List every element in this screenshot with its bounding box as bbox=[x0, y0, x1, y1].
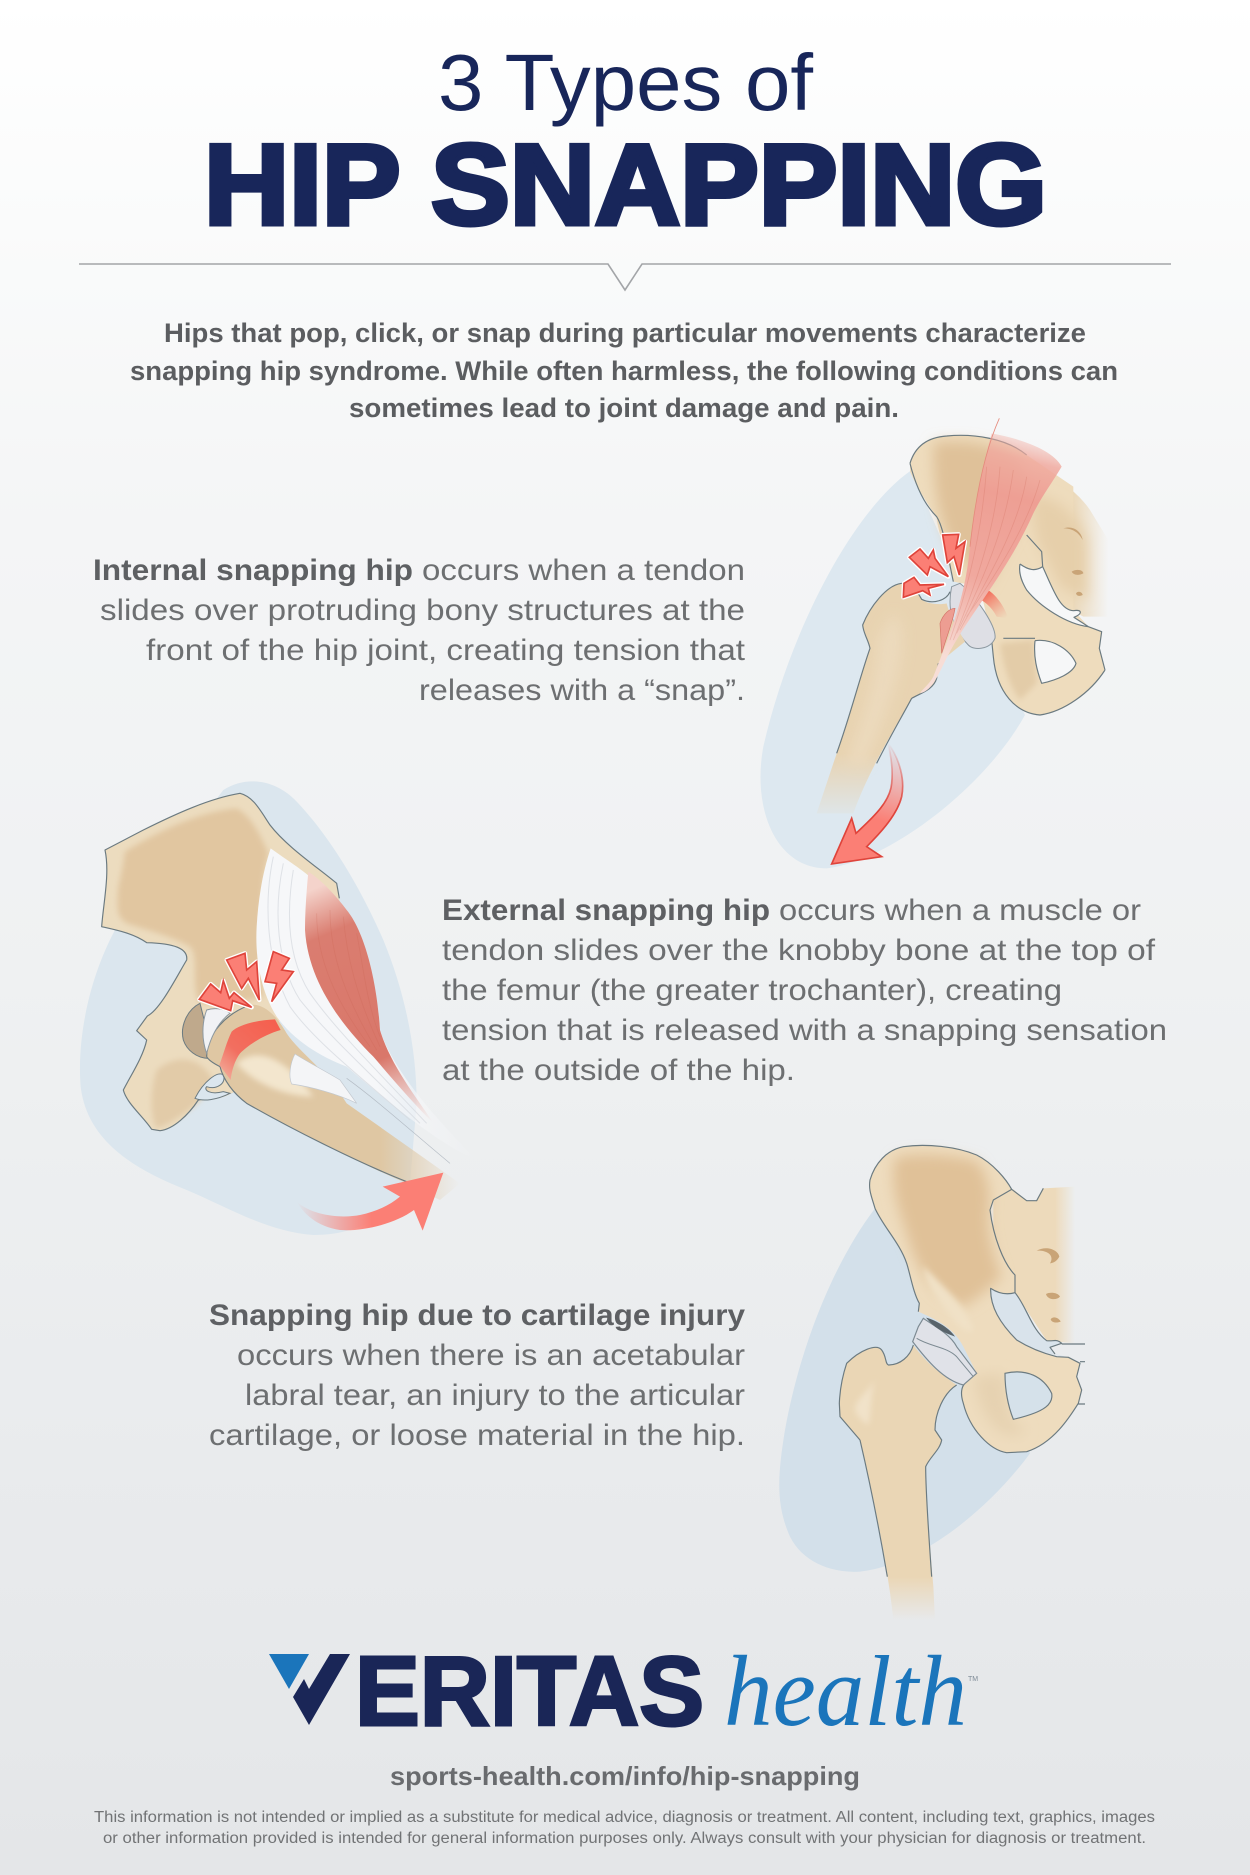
pelvis bone bbox=[910, 435, 1105, 715]
ilium highlight bbox=[923, 1267, 973, 1332]
lower tendon line bbox=[347, 1078, 450, 1163]
femur shading bbox=[847, 613, 903, 767]
gluteal muscle bbox=[305, 872, 435, 1125]
lower pelvis shading bbox=[973, 1373, 1027, 1435]
logo: Veritas health bbox=[269, 1635, 978, 1747]
motion arrow bbox=[832, 743, 903, 864]
pelvis bone bbox=[870, 1145, 1082, 1453]
red inflamed area bbox=[219, 1019, 281, 1080]
pelvis shading bbox=[118, 808, 268, 1003]
text block: external snapping hip: at the outside of the hip. bbox=[442, 1054, 795, 1087]
logo health script: health bbox=[724, 1635, 967, 1747]
text block: cartilage injury: Snapping hip due to cartilage injury bbox=[209, 1299, 745, 1332]
tendon outline bbox=[970, 418, 999, 547]
lower pelvis shading bbox=[152, 1060, 213, 1128]
text block: internal snapping hip: slides over protruding bony structures at the bbox=[100, 594, 745, 627]
pelvis shading bbox=[933, 442, 1030, 587]
joint cartilage bbox=[913, 1318, 977, 1385]
ilium shading bbox=[893, 1155, 1002, 1307]
divider with notch bbox=[79, 264, 1171, 290]
sacrum bbox=[993, 1187, 1075, 1343]
logo wordmark: ERITAS bbox=[355, 1636, 704, 1746]
text block: cartilage injury: cartilage, or loose material in the hip. bbox=[209, 1419, 745, 1452]
blue backdrop bbox=[80, 781, 417, 1235]
text block: internal snapping hip bbox=[93, 554, 746, 707]
blue backdrop bbox=[760, 470, 1025, 868]
title line: HIP SNAPPING: HIP SNAPPING bbox=[204, 122, 1047, 249]
obturator opening bbox=[195, 1074, 230, 1100]
disclaimer: This information is not intended or implied as a substitute for medical advice, diagnosis or treatment. All content, including text, graphics, images bbox=[94, 1809, 1155, 1826]
illustration: internal snapping hip bbox=[760, 418, 1108, 868]
text block: cartilage injury bbox=[209, 1299, 745, 1452]
impact bolts bbox=[903, 534, 965, 597]
femur highlight bbox=[237, 1055, 313, 1097]
title bbox=[204, 38, 1047, 249]
illustration: cartilage injury hip bbox=[779, 1145, 1085, 1620]
cartilage line bbox=[917, 1338, 973, 1377]
sacral foramina bbox=[1063, 527, 1083, 596]
text block: internal snapping hip: Internal snapping hip bbox=[93, 554, 413, 587]
obturator opening bbox=[1005, 1372, 1052, 1419]
text block: internal snapping hip: occurs when a tendon bbox=[422, 554, 745, 587]
impact bolts bbox=[199, 952, 293, 1011]
labral tear bbox=[926, 1318, 955, 1337]
text block: cartilage injury: occurs when there is an acetabular bbox=[237, 1339, 745, 1372]
joint cartilage bbox=[950, 583, 995, 648]
text block: external snapping hip bbox=[442, 894, 1167, 1087]
red inflamed area bbox=[974, 586, 1008, 618]
femur outline bbox=[837, 583, 950, 763]
IT band bbox=[256, 848, 477, 1160]
intro text block: sometimes lead to joint damage and pain. bbox=[349, 393, 899, 423]
text block: external snapping hip: External snapping hip bbox=[442, 894, 770, 927]
muscle fibres bbox=[950, 467, 1040, 640]
femur bbox=[839, 1345, 957, 1620]
muscle fibres bbox=[317, 910, 380, 1050]
sacral foramina bbox=[1037, 1248, 1061, 1323]
iliopsoas muscle bbox=[920, 433, 1062, 693]
sacrum shading bbox=[1030, 496, 1087, 600]
pelvis outline bbox=[102, 793, 339, 1131]
band fibres bbox=[268, 857, 427, 1123]
logo V mark bbox=[293, 1654, 350, 1725]
motion arrow bbox=[297, 1173, 443, 1231]
title line: 3 Types of: 3 Types of bbox=[438, 38, 814, 127]
text block: external snapping hip: occurs when a muscle or bbox=[779, 894, 1141, 927]
text block: external snapping hip: the femur (the greater trochanter), creating bbox=[442, 974, 1062, 1007]
intro text block bbox=[130, 318, 1118, 423]
text block: external snapping hip: tendon slides over the knobby bone at the top of bbox=[442, 934, 1156, 967]
pelvis holes bbox=[1020, 564, 1088, 627]
text block: internal snapping hip: releases with a “snap”. bbox=[419, 674, 745, 707]
femur outline bbox=[839, 1345, 957, 1577]
disclaimer: or other information provided is intended for general information purposes only. Always consult with your physician for diagnosis or treatment. bbox=[103, 1830, 1146, 1847]
trademark: TM bbox=[968, 1676, 978, 1683]
intro text block: Hips that pop, click, or snap during particular movements characterize bbox=[164, 318, 1086, 348]
logo triangle bbox=[269, 1654, 309, 1689]
labrum bbox=[203, 1009, 230, 1053]
tendon stump bbox=[290, 1054, 357, 1103]
pelvis bone bbox=[102, 793, 343, 1131]
femur detail bbox=[855, 1380, 875, 1425]
sacroiliac opening bbox=[991, 1288, 1068, 1357]
ischium shading bbox=[1000, 640, 1037, 700]
acetabulum bbox=[182, 1003, 208, 1058]
femur bbox=[817, 583, 965, 813]
illustration: external snapping hip bbox=[80, 781, 477, 1235]
tendon insertion bbox=[940, 608, 955, 653]
source url: sports-health.com/info/hip-snapping bbox=[390, 1761, 860, 1791]
disclaimer bbox=[94, 1809, 1155, 1847]
pelvis outline bbox=[870, 1145, 1085, 1453]
text block: external snapping hip: tension that is released with a snapping sensation bbox=[442, 1014, 1167, 1047]
text block: internal snapping hip: front of the hip joint, creating tension that bbox=[146, 634, 746, 667]
femur outline bbox=[207, 1005, 407, 1182]
text block: cartilage injury: labral tear, an injury to the articular bbox=[245, 1379, 745, 1412]
sacrum bbox=[1053, 480, 1108, 617]
femur bbox=[207, 1005, 460, 1200]
pelvis outline bbox=[910, 435, 1105, 715]
intro text block: snapping hip syndrome. While often harmless, the following conditions can bbox=[130, 356, 1118, 386]
blue backdrop bbox=[779, 1208, 1030, 1572]
